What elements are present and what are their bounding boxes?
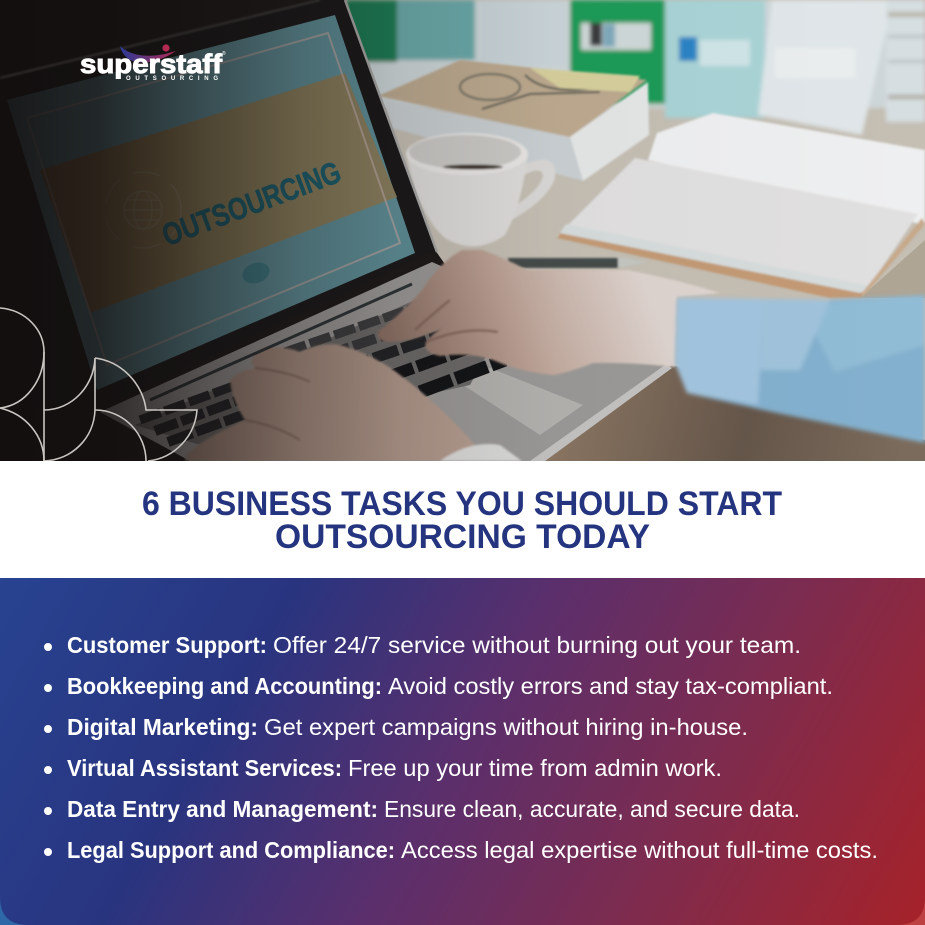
- decorative outline shapes: [0, 308, 197, 461]
- title band: [0, 461, 925, 578]
- panel background: [0, 578, 925, 925]
- task: virtual assistant services: [44, 755, 722, 781]
- task: customer support: Customer Support:: [67, 632, 267, 658]
- panel corner accents: [0, 895, 40, 925]
- right hand: [378, 250, 720, 375]
- keyboard: [135, 300, 505, 445]
- title: 6 BUSINESS TASKS YOU SHOULD START: [142, 485, 782, 523]
- logo wordmark: superstaff: [80, 49, 223, 79]
- title: OUTSOURCING TODAY: [275, 518, 650, 556]
- screen button: [242, 262, 270, 284]
- trackpad: [460, 368, 583, 435]
- open notebook: [557, 113, 925, 298]
- shirt sleeve: [675, 295, 925, 443]
- screen word: OUTSOURCING: OUTSOURCING: [157, 154, 346, 253]
- screen frame lines: [27, 33, 400, 365]
- laptop hinge line: [150, 284, 412, 400]
- task: virtual assistant services: Free up your time from admin work.: [348, 755, 722, 781]
- hero photo: hands typing on a laptop on a desk: [0, 0, 925, 461]
- logo registered mark: ®: [222, 50, 226, 57]
- task: data entry and management: [44, 796, 800, 822]
- lid edge highlight: [345, 0, 437, 252]
- task: digital marketing: Digital Marketing:: [67, 714, 258, 740]
- laptop screen: [7, 15, 415, 390]
- task: bookkeeping and accounting: Bookkeeping and Accounting:: [67, 673, 382, 699]
- left hand: [185, 344, 522, 461]
- task: bookkeeping and accounting: [44, 673, 833, 699]
- coffee cup: [406, 133, 555, 246]
- screen globe icon: [160, 184, 182, 236]
- dark photo overlay: [0, 0, 526, 461]
- book under glasses: [378, 60, 649, 181]
- task: digital marketing: [44, 714, 748, 740]
- logo subtitle: OUTSOURCING: [126, 76, 218, 82]
- pen: [508, 257, 648, 268]
- gradient panel with task list: [0, 578, 925, 925]
- wooden desk foreground: [540, 365, 925, 461]
- laptop lid and bezel: [423, 218, 435, 250]
- logo: superstaff outsourcing: [80, 44, 226, 82]
- laptop base: [100, 262, 672, 461]
- dark left background: [0, 0, 470, 461]
- task: legal support and compliance: Access legal expertise without full-time costs.: [401, 837, 878, 863]
- title: [142, 485, 782, 556]
- task: legal support and compliance: Legal Support and Compliance:: [67, 837, 395, 863]
- shelf of binders: [340, 0, 925, 135]
- task: customer support: [44, 632, 801, 658]
- faint top-of-lid highlight: [0, 0, 320, 78]
- task: bookkeeping and accounting: Avoid costly errors and stay tax-compliant.: [388, 673, 833, 699]
- task list: [44, 632, 878, 863]
- task: customer support: Offer 24/7 service without burning out your team.: [273, 632, 801, 658]
- screen yellow band: [40, 73, 397, 313]
- task: data entry and management: Data Entry and Management:: [67, 796, 378, 822]
- task: virtual assistant services: Virtual Assistant Services:: [67, 755, 342, 781]
- logo dot: [162, 44, 170, 52]
- logo swoosh: [120, 46, 176, 63]
- task: legal support and compliance: [44, 837, 878, 863]
- task: data entry and management: Ensure clean, accurate, and secure data.: [384, 796, 800, 822]
- task: digital marketing: Get expert campaigns without hiring in-house.: [264, 714, 748, 740]
